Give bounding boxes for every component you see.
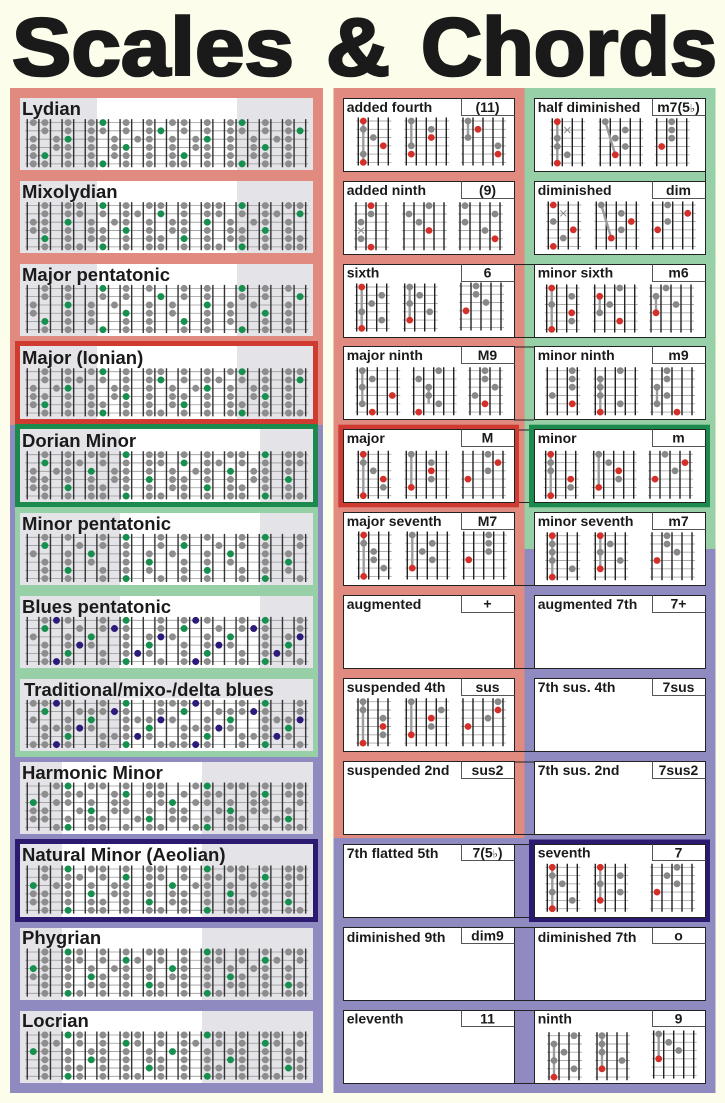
scale: Blues pentatonic: Blues pentatonic: [22, 596, 171, 617]
chord card: 7th sus. 4th: 7th sus. 4th: [538, 679, 615, 695]
chord card: augmented 7th: [534, 596, 706, 668]
chord card: suspended 2nd: suspended 2nd: [347, 762, 449, 778]
chord card: augmented: +: [483, 596, 492, 612]
chord card: minor: minor: [538, 430, 577, 446]
chord card: half diminished: half diminished: [538, 99, 640, 115]
chord card: minor seventh: minor seventh: [538, 513, 633, 529]
title: Scales: [12, 2, 294, 93]
scale: Phygrian: [20, 927, 313, 1000]
chord card: diminished 9th: dim9: [471, 928, 504, 944]
scale: Phygrian: Phygrian: [22, 927, 101, 948]
scale: Lydian: [20, 98, 313, 170]
chord card: seventh: seventh: [538, 844, 591, 860]
chord card: augmented: augmented: [347, 596, 421, 612]
chord card: minor sixth: [534, 264, 706, 338]
scale: Locrian: Locrian: [22, 1010, 89, 1031]
chord card: diminished 9th: [344, 928, 514, 1000]
chord card: added ninth: added ninth: [347, 182, 426, 198]
chord card: ninth: [534, 1010, 706, 1084]
chord card: added ninth: [344, 182, 514, 254]
scale: Major pentatonic: [20, 264, 313, 336]
chord card: 7th sus. 2nd: 7sus2: [659, 762, 699, 778]
chord card: ninth: ninth: [538, 1010, 572, 1026]
scale: Natural Minor (Aeolian): Natural Minor (Aeolian): [22, 844, 226, 865]
panel: scales background: [10, 88, 323, 1093]
chord card: major: [344, 430, 514, 502]
chord card: major: major: [347, 430, 385, 446]
chord card: minor sixth: m6: [668, 264, 689, 280]
chord card: diminished: [534, 182, 706, 254]
chord card: minor seventh: m7: [668, 513, 689, 529]
chord card: 7th flatted 5th: [344, 844, 514, 918]
chord card: sixth: sixth: [347, 264, 379, 280]
chord card: half diminished: [534, 98, 706, 172]
chord card: 7th sus. 2nd: [534, 762, 706, 834]
chord card: suspended 4th: suspended 4th: [347, 679, 445, 695]
chord card: added fourth: (11): [475, 99, 500, 115]
chord card: seventh: [534, 844, 706, 918]
chord card: suspended 2nd: [344, 762, 514, 834]
chord card: minor: m: [672, 430, 685, 446]
chord card: minor ninth: minor ninth: [538, 347, 615, 363]
chord card: eleventh: eleventh: [347, 1010, 404, 1026]
chord card: sixth: 6: [484, 264, 492, 280]
highlight frame: major: [341, 427, 516, 505]
highlight frame: seventh: [532, 842, 708, 920]
chord card: augmented 7th: 7+: [671, 596, 686, 612]
panel: chords background: [334, 88, 716, 1093]
scale: Harmonic Minor: [20, 762, 313, 834]
chord card: 7th sus. 4th: 7sus: [663, 679, 695, 695]
chord card: 7th sus. 2nd: 7th sus. 2nd: [538, 762, 619, 778]
scale: Dorian Minor: [18, 426, 316, 504]
scale: Major pentatonic: Major pentatonic: [22, 264, 170, 285]
title: &: [326, 2, 390, 93]
chord card: sixth: [344, 264, 514, 338]
chord card: added fourth: [344, 98, 514, 172]
title: Chords: [421, 2, 717, 93]
scale: Natural Minor (Aeolian): [18, 842, 316, 920]
scale: Minor pentatonic: [20, 513, 313, 585]
chord card: added fourth: added fourth: [347, 99, 432, 115]
highlight frame: minor: [532, 427, 708, 505]
chord card: 7th flatted 5th: 7th flatted 5th: [347, 845, 438, 861]
chord card: half diminished: m7(5♭): [657, 99, 700, 115]
chord card: seventh: 7: [675, 844, 683, 860]
chord card: augmented 7th: augmented 7th: [538, 596, 637, 612]
chord card: 7th sus. 4th: [534, 678, 706, 752]
chord card: major: M: [482, 430, 493, 446]
scale: Dorian Minor: Dorian Minor: [22, 430, 136, 451]
chord card: augmented: [344, 596, 514, 668]
chord card: minor: [534, 430, 706, 502]
scale: Mixolydian: [20, 181, 313, 253]
chord card: diminished 7th: [534, 928, 706, 1000]
scale: Traditional/mixo-/delta blues: Traditional/mixo-/delta blues: [24, 679, 274, 700]
chord card: major ninth: M9: [478, 347, 497, 363]
scale: Major (Ionian): Major (Ionian): [22, 347, 143, 368]
chord card: suspended 4th: sus: [475, 679, 500, 695]
chord card: suspended 2nd: sus2: [472, 762, 504, 778]
chord card: diminished: diminished: [538, 182, 612, 198]
scale: Traditional/mixo-/delta blues: [20, 679, 313, 751]
chord card: ninth: 9: [675, 1010, 683, 1026]
chord card: minor seventh: [534, 512, 706, 586]
scale: Mixolydian: Mixolydian: [22, 181, 118, 202]
chord card: diminished: dim: [666, 182, 691, 198]
chord card: added ninth: (9): [479, 182, 496, 198]
chord card: major seventh: M7: [478, 513, 497, 529]
scale: Major (Ionian): [18, 344, 316, 422]
chord card: major ninth: major ninth: [347, 347, 423, 363]
chord card: eleventh: [344, 1010, 514, 1084]
chord card: major ninth: [344, 346, 514, 420]
chord card: minor ninth: m9: [668, 347, 689, 363]
chord card: diminished 7th: o: [674, 928, 683, 944]
chord card: suspended 4th: [344, 678, 514, 752]
chord card: minor ninth: [534, 346, 706, 420]
scale: Minor pentatonic: Minor pentatonic: [22, 513, 171, 534]
scale: Blues pentatonic: [20, 596, 313, 668]
scale: Lydian: Lydian: [22, 98, 81, 119]
title: [12, 2, 717, 93]
chord card: diminished 9th: diminished 9th: [347, 929, 445, 945]
chord card: 7th flatted 5th: 7(5♭): [472, 844, 503, 860]
chord card: eleventh: 11: [480, 1010, 495, 1026]
scale: Locrian: [20, 1010, 313, 1083]
chord card: minor sixth: minor sixth: [538, 264, 613, 280]
chord card: major seventh: major seventh: [347, 513, 442, 529]
scale: Harmonic Minor: Harmonic Minor: [22, 762, 163, 783]
chord card: major seventh: [344, 512, 514, 586]
chord card: diminished 7th: diminished 7th: [538, 929, 636, 945]
